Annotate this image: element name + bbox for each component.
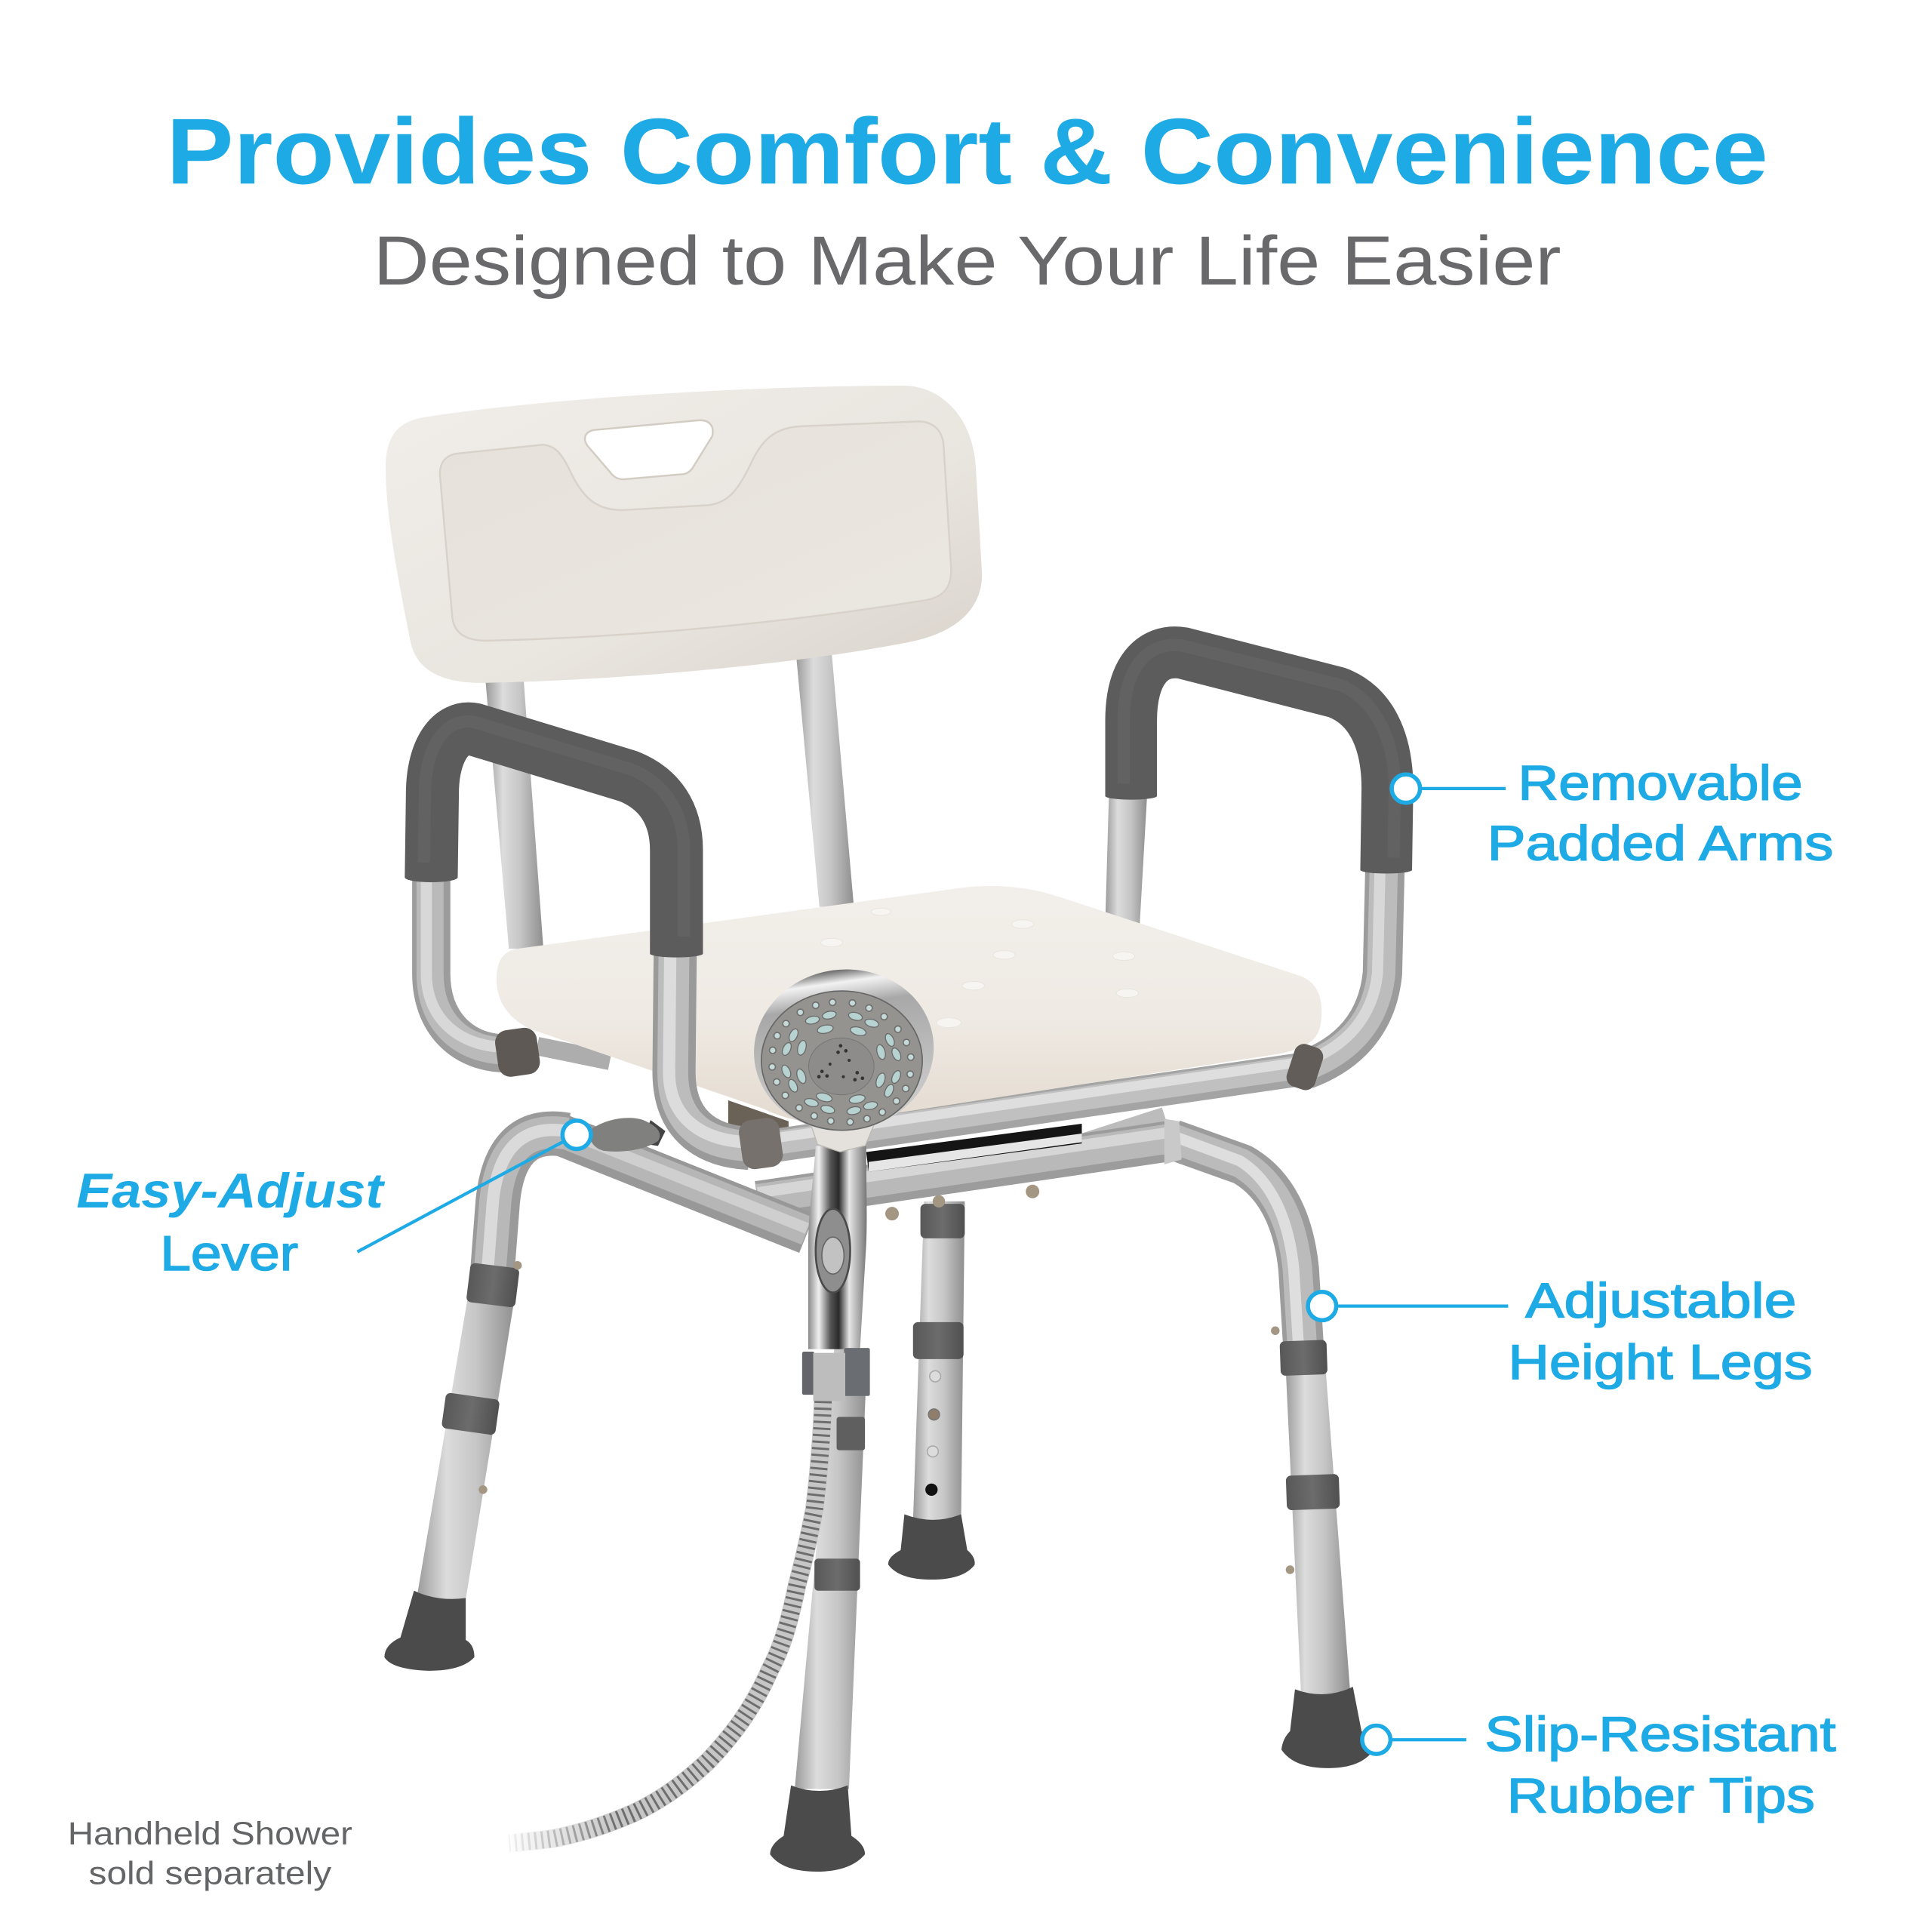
right arm pad <box>1105 645 1412 874</box>
handle button <box>816 1209 851 1293</box>
left front leg <box>384 1261 521 1671</box>
flexible shower hose <box>509 1401 823 1843</box>
front centre leg <box>770 1349 867 1872</box>
outer round nozzles <box>769 999 914 1125</box>
left front cap <box>737 1116 784 1171</box>
seat frame tube <box>764 1062 1300 1147</box>
callout: slip-resistant rubber tips: Rubber Tips <box>1507 1768 1815 1823</box>
front rail <box>758 1132 1171 1201</box>
right removable arm <box>1105 645 1412 1093</box>
shower handle <box>802 1146 870 1401</box>
callout: easy-adjust lever: Easy-Adjust <box>76 1163 385 1218</box>
right front leg <box>1271 1327 1374 1768</box>
left leg arch <box>487 1130 567 1281</box>
front rubber tip <box>770 1786 865 1872</box>
handle neck <box>810 1121 875 1152</box>
footnote: handheld shower sold separately: Handheld Shower <box>68 1816 352 1851</box>
left arm pad <box>405 721 703 958</box>
backrest <box>386 386 982 683</box>
frame gusset <box>1164 1118 1182 1164</box>
title: Provides Comfort & Convenience <box>166 100 1768 204</box>
callout: removable padded arms: Padded Arms <box>1487 816 1833 871</box>
recessed backrest panel <box>440 421 951 641</box>
shower head <box>743 958 944 1152</box>
rear seat tube <box>537 1046 610 1061</box>
left rear metal tube <box>426 877 508 1054</box>
left front metal tube <box>669 951 749 1149</box>
callout: adjustable height legs: Adjustable <box>1525 1272 1796 1327</box>
backrest handle hole <box>585 420 713 479</box>
base frame rails and arches <box>487 1115 1303 1349</box>
rear cross rail <box>1084 1115 1164 1141</box>
adjust lever <box>589 1118 666 1152</box>
hose clip <box>802 1348 870 1401</box>
right rubber tip <box>1281 1687 1374 1768</box>
subtitle: Designed to Make Your Life Easier <box>374 223 1561 300</box>
callout: removable padded arms: Removable <box>1518 755 1803 811</box>
left rail <box>555 1128 807 1233</box>
chrome rim <box>743 958 944 1143</box>
right cap <box>1284 1041 1326 1093</box>
mounting bolts <box>885 1207 899 1220</box>
seat drainage dimples <box>820 908 1139 1028</box>
callout: adjustable height legs <box>1308 1272 1813 1389</box>
spray face <box>761 991 922 1131</box>
callout: removable padded arms <box>1392 755 1833 871</box>
left removable arm <box>405 721 784 1171</box>
callout: easy-adjust lever: Lever <box>160 1226 298 1281</box>
footnote: handheld shower sold separately <box>68 1816 352 1890</box>
footnote: handheld shower sold separately: sold separately <box>89 1855 332 1890</box>
backrest uprights <box>485 653 854 949</box>
seat <box>497 886 1321 1123</box>
rear centre rubber tip <box>888 1515 975 1580</box>
callout: slip-resistant rubber tips <box>1362 1706 1836 1823</box>
callout: adjustable height legs: Height Legs <box>1508 1334 1813 1389</box>
right rear arm tube <box>1105 795 1147 924</box>
left rear cap <box>494 1026 542 1078</box>
right leg arch <box>1173 1136 1303 1349</box>
callout: easy-adjust lever <box>76 1121 591 1281</box>
right front metal tube <box>1303 869 1385 1069</box>
swivel bracket <box>728 1100 1081 1172</box>
rear centre leg <box>888 1201 975 1580</box>
shower chair product illustration <box>384 386 1412 1872</box>
callout: slip-resistant rubber tips: Slip-Resistant <box>1484 1706 1836 1761</box>
left rubber tip <box>384 1591 475 1671</box>
oval nozzles <box>780 1010 903 1116</box>
centre jet disc <box>809 1038 874 1095</box>
